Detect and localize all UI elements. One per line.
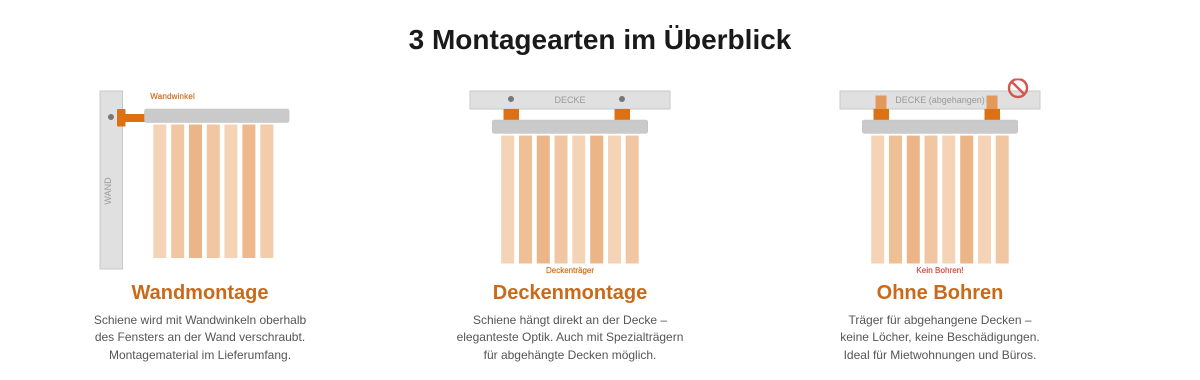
slats (501, 136, 639, 264)
text: Deckenmontage description (457, 312, 683, 362)
text: Wandmontage description: Montagematerial im Lieferumfang. (109, 348, 291, 362)
heading: Wandmontage: Wandmontage (131, 282, 269, 304)
ceiling brackets (504, 109, 630, 120)
heading: Deckenmontage: Deckenmontage (493, 282, 647, 304)
label: Deckenträger: Deckenträger (546, 266, 594, 275)
slats (153, 124, 273, 258)
diagram: Ohne Bohren (840, 79, 1040, 275)
wall screw (108, 114, 114, 120)
ceiling (470, 91, 670, 109)
wall: WAND (103, 177, 113, 205)
clamp brackets (874, 109, 1000, 120)
rail (144, 109, 289, 122)
text: Wandmontage description: des Fensters an der Wand verschraubt. (95, 330, 305, 344)
rail (862, 120, 1018, 133)
text: Deckenmontage description: Schiene hängt direkt an der Decke – (473, 312, 667, 326)
heading: Ohne Bohren: Ohne Bohren (877, 282, 1003, 304)
wall bracket (117, 109, 145, 126)
diagrams (100, 78, 1040, 275)
title: 3 Montagearten im Überblick (409, 24, 791, 55)
text: Wandmontage description (94, 312, 306, 362)
text: Ohne Bohren description: keine Löcher, keine Beschädigungen. (840, 330, 1040, 344)
ceiling screws (508, 96, 625, 102)
slats (871, 136, 1009, 264)
text: Wandmontage description: Schiene wird mit Wandwinkeln oberhalb (94, 312, 306, 326)
label: Kein Bohren: Kein Bohren! (916, 266, 964, 275)
suspended ceiling: DECKE (abgehangen) (895, 95, 985, 105)
text: Ohne Bohren description (840, 312, 1040, 362)
text: Deckenmontage description: für abgehängte Decken möglich. (484, 348, 656, 362)
text: Deckenmontage description: eleganteste Optik. Auch mit Spezialträgern (457, 330, 683, 344)
clamp stubs (876, 96, 998, 109)
wall (100, 91, 122, 269)
diagram: Deckenmontage (470, 91, 670, 275)
icon: no drilling (1009, 79, 1027, 97)
diagram: Wandmontage (100, 91, 289, 269)
rail (492, 120, 648, 133)
text: Ohne Bohren description: Ideal für Mietwohnungen und Büros. (844, 348, 1036, 362)
suspended ceiling (840, 91, 1040, 109)
ceiling: DECKE (554, 95, 586, 105)
label: Wandwinkel: Wandwinkel (150, 92, 195, 101)
text: Ohne Bohren description: Träger für abgehangene Decken – (848, 312, 1032, 326)
